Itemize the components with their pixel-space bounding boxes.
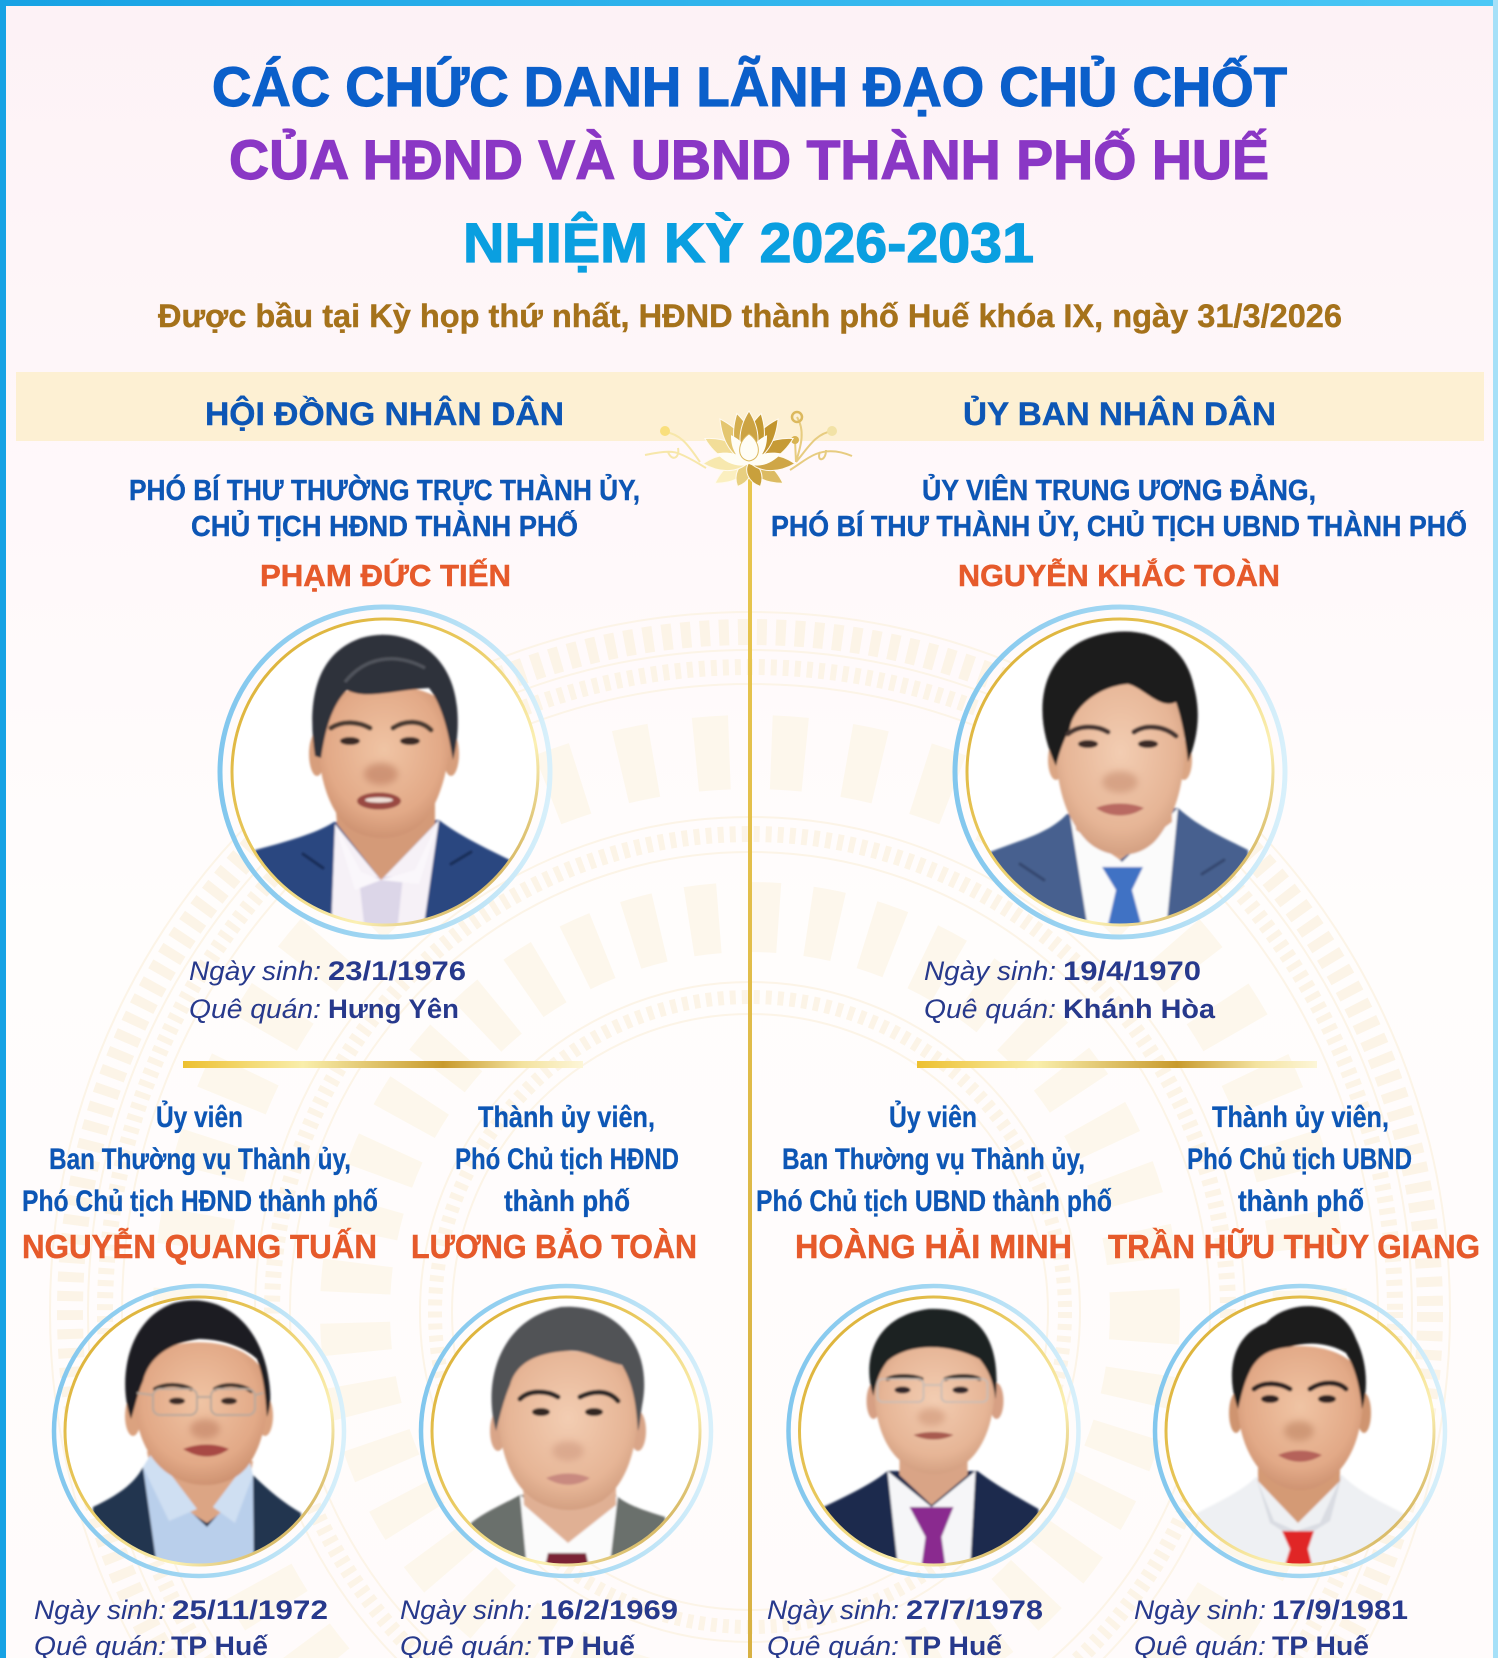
text: birth info Trần Hữu Thùy Giang: Ngày sinh: (1134, 1595, 1266, 1625)
column: UBND chairman role and name (771, 473, 1467, 593)
title: CỦA HĐND VÀ UBND THÀNH PHỐ HUẾ (229, 128, 1269, 191)
column: Lương Bảo Toàn role and name: thành phố (504, 1185, 630, 1218)
column: HĐND chairman role and name: PHÓ BÍ THƯ THƯỜNG TRỰC THÀNH ỦY, (129, 473, 640, 507)
portrait: Lương Bảo Toàn (421, 1286, 711, 1581)
column: Lương Bảo Toàn role and name: Phó Chủ tịch HĐND (455, 1143, 679, 1176)
column: Lương Bảo Toàn role and name: LƯƠNG BẢO TOÀN (411, 1228, 697, 1265)
portrait: Trần Hữu Thùy Giang (1155, 1286, 1445, 1581)
portrait: Hoàng Hải Minh (788, 1286, 1078, 1581)
text: birth info Lương Bảo Toàn: 16/2/1969 (540, 1595, 678, 1625)
portrait: Nguyễn Khắc Toàn (955, 607, 1285, 942)
column: Nguyễn Quang Tuấn role and name: Ban Thường vụ Thành ủy, (49, 1143, 351, 1176)
text: birth info Phạm Đức Tiến: 23/1/1976 (328, 956, 466, 986)
column: UBND chairman role and name: ỦY VIÊN TRUNG ƯƠNG ĐẢNG, (922, 473, 1316, 507)
column: HĐND chairman role and name (129, 473, 640, 593)
column: HĐND chairman role and name: PHẠM ĐỨC TIẾN (260, 557, 511, 593)
column: Lương Bảo Toàn role and name: Thành ủy viên, (478, 1101, 655, 1134)
section header band: HỘI ĐỒNG NHÂN DÂN (205, 396, 564, 432)
text: birth info Nguyễn Khắc Toàn: Khánh Hòa (1063, 994, 1216, 1024)
column: Hoàng Hải Minh role and name: HOÀNG HẢI MINH (795, 1228, 1072, 1265)
text: birth info Nguyễn Quang Tuấn: Ngày sinh: (34, 1595, 166, 1625)
column: Nguyễn Quang Tuấn role and name: Ủy viên (156, 1100, 243, 1134)
column: Nguyễn Quang Tuấn role and name (22, 1100, 378, 1265)
text: birth info Nguyễn Khắc Toàn (924, 956, 1216, 1024)
text: birth info Lương Bảo Toàn: Ngày sinh: (400, 1595, 532, 1625)
column: Hoàng Hải Minh role and name: Phó Chủ tịch UBND thành phố (756, 1185, 1112, 1218)
column: Trần Hữu Thùy Giang role and name: Phó Chủ tịch UBND (1187, 1143, 1412, 1176)
column: Lương Bảo Toàn role and name (411, 1101, 697, 1265)
column: Nguyễn Quang Tuấn role and name: Phó Chủ tịch HĐND thành phố (22, 1185, 378, 1218)
column: Trần Hữu Thùy Giang role and name: TRẦN HỮU THÙY GIANG (1108, 1228, 1480, 1265)
column: Trần Hữu Thùy Giang role and name: thành phố (1238, 1185, 1364, 1218)
title: NHIỆM KỲ 2026-2031 (463, 211, 1034, 274)
column: Trần Hữu Thùy Giang role and name (1108, 1101, 1480, 1265)
portrait: Phạm Đức Tiến (220, 607, 550, 942)
text: birth info Nguyễn Khắc Toàn: 19/4/1970 (1063, 956, 1201, 986)
text: birth info Phạm Đức Tiến (189, 956, 466, 1024)
text: birth info Hoàng Hải Minh (767, 1595, 1043, 1658)
text: birth info Phạm Đức Tiến: Hưng Yên (328, 994, 459, 1024)
background: bronze drum watermark (50, 612, 1450, 1658)
text: birth info Lương Bảo Toàn (400, 1595, 678, 1658)
column: Hoàng Hải Minh role and name: Ban Thường vụ Thành ủy, (782, 1143, 1085, 1176)
icon: golden lotus (645, 411, 852, 490)
text: birth info Trần Hữu Thùy Giang (1134, 1595, 1408, 1658)
divider: left gold (183, 1061, 583, 1068)
title: CÁC CHỨC DANH LÃNH ĐẠO CHỦ CHỐT (212, 55, 1287, 118)
divider: right gold (917, 1061, 1317, 1068)
section header band (16, 372, 1484, 441)
column: Nguyễn Quang Tuấn role and name: NGUYỄN QUANG TUẤN (22, 1228, 377, 1265)
text: birth info Phạm Đức Tiến: Ngày sinh: (189, 956, 321, 986)
column: Hoàng Hải Minh role and name: Ủy viên (889, 1100, 977, 1134)
text: birth info Nguyễn Quang Tuấn: 25/11/1972 (172, 1595, 328, 1625)
center divider line (748, 478, 752, 1658)
text: birth info Trần Hữu Thùy Giang: 17/9/1981 (1272, 1595, 1408, 1625)
section header band: ỦY BAN NHÂN DÂN (963, 396, 1276, 432)
column: HĐND chairman role and name: CHỦ TỊCH HĐND THÀNH PHỐ (191, 509, 578, 543)
title (212, 55, 1287, 274)
column: Hoàng Hải Minh role and name (756, 1100, 1112, 1265)
subtitle: Được bầu tại Kỳ họp thứ nhất, HĐND thành phố Huế khóa IX, ngày 31/3/2026 (158, 298, 1342, 334)
column: UBND chairman role and name: NGUYỄN KHẮC TOÀN (958, 557, 1280, 593)
text: birth info Nguyễn Khắc Toàn: Quê quán: (924, 994, 1056, 1024)
text: birth info Nguyễn Quang Tuấn (34, 1595, 328, 1658)
text: birth info Phạm Đức Tiến: Quê quán: (189, 994, 321, 1024)
column: Trần Hữu Thùy Giang role and name: Thành ủy viên, (1212, 1101, 1389, 1134)
text: birth info Hoàng Hải Minh: Ngày sinh: (767, 1595, 899, 1625)
text: birth info Nguyễn Khắc Toàn: Ngày sinh: (924, 956, 1056, 986)
text: birth info Hoàng Hải Minh: 27/7/1978 (906, 1595, 1043, 1625)
portrait: Nguyễn Quang Tuấn (54, 1286, 344, 1581)
